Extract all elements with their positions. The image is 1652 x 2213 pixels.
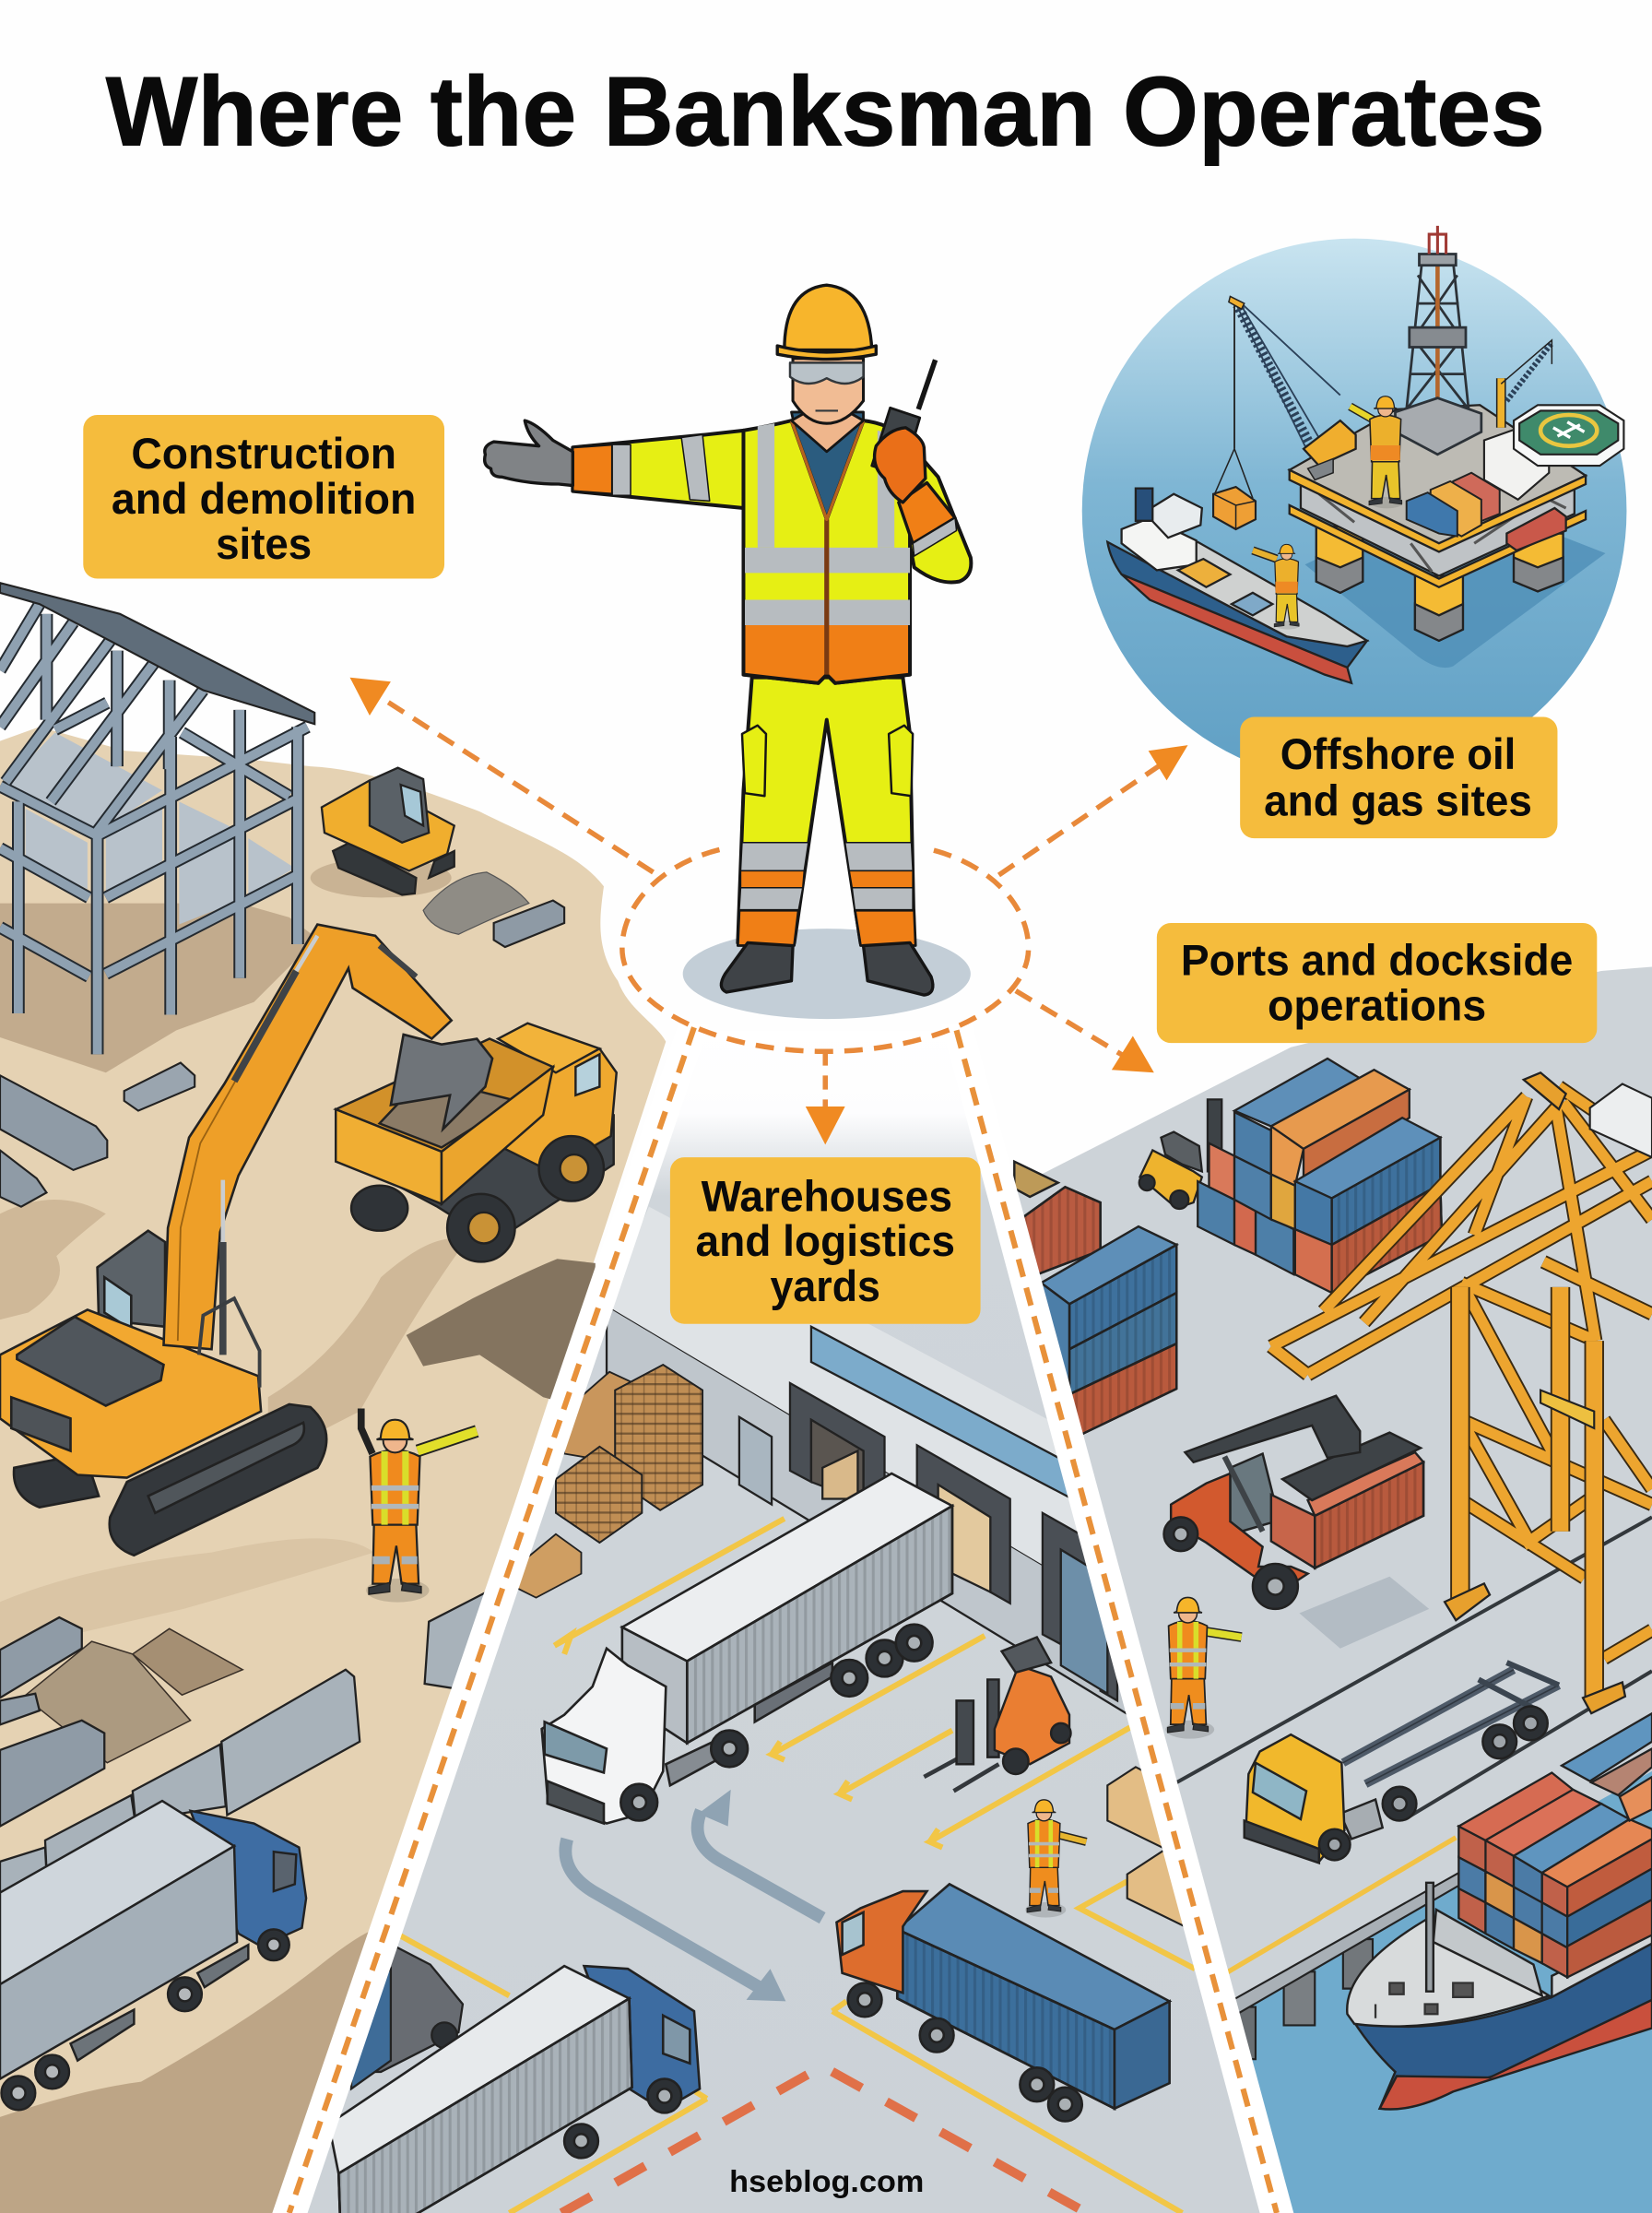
divider: right dashed line xyxy=(957,1030,1277,2213)
derrick tower xyxy=(1395,226,1481,455)
left stack of containers xyxy=(1014,1162,1176,1438)
dirt mound xyxy=(407,1259,596,1412)
label: warehouses and logistics yards: and logistics xyxy=(695,1217,955,1266)
yellow floor markings xyxy=(396,1519,1195,2213)
boxes xyxy=(1107,1767,1199,1934)
small bulldozer xyxy=(311,768,454,897)
steel bundle mid xyxy=(124,1063,195,1111)
label: offshore oil and gas sites: Offshore oil xyxy=(1280,730,1516,779)
blue container truck xyxy=(836,1884,1170,2122)
small yard forklift xyxy=(1139,1099,1221,1209)
divider: right white band xyxy=(941,1024,1293,2213)
title: Where the Banksman Operates xyxy=(106,56,1545,167)
suspended cargo xyxy=(1213,449,1256,529)
loading docks xyxy=(790,1383,885,1516)
ship deck fittings xyxy=(1375,1983,1473,2018)
oil rig decks xyxy=(1290,405,1586,587)
warehouse wall xyxy=(607,1207,1128,1715)
supply ship xyxy=(1107,489,1367,683)
label: construction and demolition sites xyxy=(83,415,444,579)
arrow: to construction xyxy=(350,678,654,872)
raised arm sleeve xyxy=(903,444,971,582)
warehouse door xyxy=(739,1417,772,1505)
steel bars stack left xyxy=(0,1075,107,1207)
excavator xyxy=(0,925,492,1556)
ship containers xyxy=(1458,1713,1652,1977)
left glove xyxy=(485,420,572,486)
quay yellow line xyxy=(1226,1838,1456,1973)
crane apex xyxy=(1524,1072,1566,1109)
divider: left dashed line xyxy=(289,1027,694,2213)
label: offshore oil and gas sites xyxy=(1240,717,1557,838)
worker on ship xyxy=(1253,544,1300,630)
dump truck xyxy=(336,1024,617,1261)
hard hat xyxy=(777,285,876,360)
label: ports and dockside operations xyxy=(1157,923,1597,1043)
helipad H mark xyxy=(1553,422,1585,437)
rig containers xyxy=(1407,473,1500,537)
warehouse forklift xyxy=(924,1638,1071,1791)
platform shadow on water xyxy=(1305,494,1605,668)
flow arrow heads xyxy=(699,1790,785,2001)
excavator bucket xyxy=(391,1035,492,1129)
panel: warehouses and logistics yard xyxy=(268,1030,1298,2213)
label: construction and demolition sites: Construction xyxy=(131,430,396,479)
gantry crane xyxy=(1271,1072,1652,1713)
label: warehouses and logistics yards: Warehouses xyxy=(702,1172,952,1221)
concrete barriers xyxy=(0,1592,487,1896)
excavator cabin xyxy=(98,1231,165,1327)
grey van with blue cargo xyxy=(351,1945,463,2089)
traffic flow arrows xyxy=(565,1811,822,1993)
ground shadow xyxy=(683,929,971,1019)
arrow: to warehouses xyxy=(806,1051,845,1144)
arrow: to offshore xyxy=(998,745,1188,875)
steel bundle near gravel xyxy=(494,901,564,947)
lower white semi truck xyxy=(329,1966,700,2213)
water xyxy=(1230,1771,1652,2213)
label: construction and demolition sites: sites xyxy=(216,520,312,569)
excavator tracks xyxy=(14,1454,99,1508)
oil rig legs xyxy=(1316,527,1564,641)
white semi truck xyxy=(542,1473,952,1824)
worker on rig xyxy=(1351,396,1403,508)
steel frame building xyxy=(0,583,314,1054)
yard worker xyxy=(1025,1800,1086,1917)
building frame outline xyxy=(0,604,308,1054)
arrow: to ports xyxy=(1016,990,1154,1072)
building floor slabs xyxy=(0,732,295,925)
boots xyxy=(721,942,933,995)
port worker xyxy=(1165,1597,1242,1739)
lower steel bars xyxy=(0,1617,104,1827)
right glove and cuff xyxy=(875,428,957,556)
radio xyxy=(872,360,936,476)
label: offshore oil and gas sites: and gas sites xyxy=(1264,777,1532,826)
sea circle xyxy=(1082,239,1626,783)
legs xyxy=(738,678,915,946)
dark soil under building xyxy=(0,904,317,1072)
gravel pile xyxy=(423,872,529,934)
excavator handrail xyxy=(199,1298,260,1388)
building roof xyxy=(0,583,314,724)
building frame fill xyxy=(0,604,308,1054)
sand piles xyxy=(24,1628,242,1763)
quay ground xyxy=(1018,966,1652,1997)
blue cab articulated truck xyxy=(0,1801,306,2110)
extended arm sleeve xyxy=(572,431,743,508)
label: warehouses and logistics yards: yards xyxy=(771,1262,880,1311)
panel: construction and demolition site xyxy=(0,583,666,2213)
reach stacker xyxy=(1164,1396,1429,1649)
crane trolley xyxy=(1540,1391,1594,1428)
watermark: hseblog.com: hseblog.com xyxy=(729,2165,924,2199)
yard floor xyxy=(268,1030,1298,2213)
yellow tractor unit xyxy=(1245,1663,1559,1863)
label: construction and demolition sites: and demolition xyxy=(112,475,416,524)
crane feet xyxy=(1445,1583,1625,1713)
stacked containers group xyxy=(1198,1059,1442,1293)
excavator boom xyxy=(164,925,452,1349)
panel: ports and dockside xyxy=(995,966,1652,2213)
main deck crane xyxy=(1229,296,1356,479)
quay rails xyxy=(1176,1517,1652,1817)
construction worker xyxy=(361,1409,477,1603)
accommodation block and helipad xyxy=(1484,405,1623,500)
red dashed bay marking xyxy=(561,2066,1080,2213)
hi-vis vest xyxy=(743,420,910,683)
soil patches xyxy=(0,1200,466,1651)
stacked pallets xyxy=(516,1365,702,1598)
divider: left white band xyxy=(272,1024,710,2213)
cargo ship xyxy=(1347,1883,1652,2110)
pier xyxy=(1233,1873,1458,2059)
panel: offshore oil and gas scene xyxy=(1082,226,1626,783)
small deck crane xyxy=(1501,340,1552,428)
shirt xyxy=(792,412,864,522)
dashed ring around banksman xyxy=(622,849,1029,1051)
large dark sand in lower left xyxy=(0,1926,381,2213)
sand ground xyxy=(0,727,666,2213)
white container on crane xyxy=(1590,1084,1652,1157)
label: warehouses and logistics yards xyxy=(670,1157,981,1324)
banksman figure xyxy=(485,285,971,1019)
label: ports and dockside operations: operations xyxy=(1268,982,1486,1031)
excavator body xyxy=(0,1309,261,1478)
label: ports and dockside operations: Ports and dockside xyxy=(1181,937,1573,986)
head xyxy=(790,359,864,452)
